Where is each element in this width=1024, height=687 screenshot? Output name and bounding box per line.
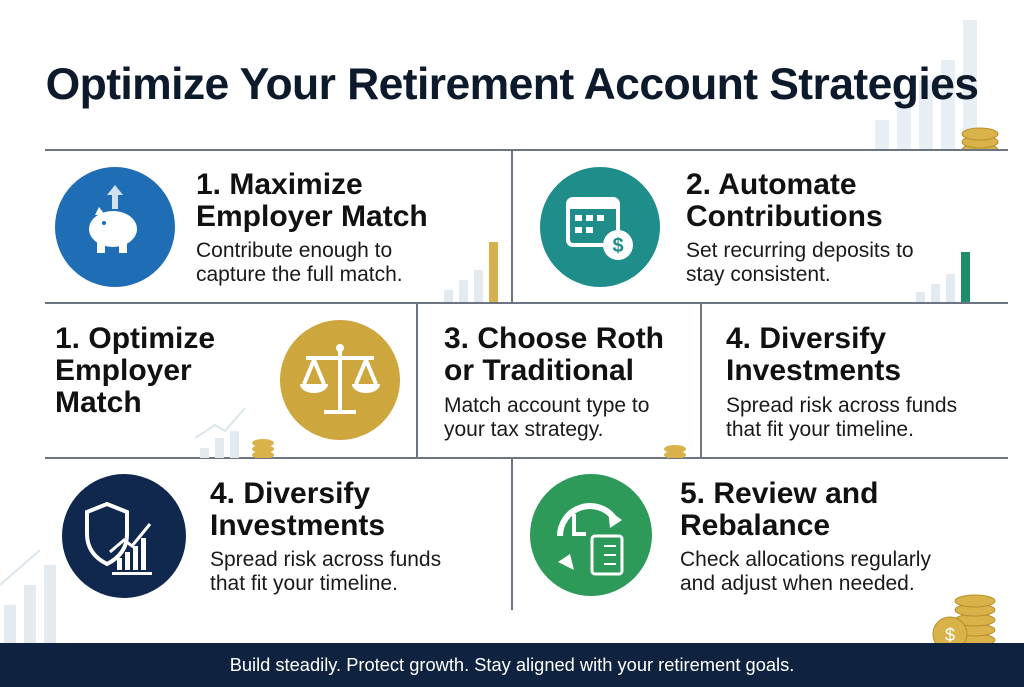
panel: maximize employer match: 1. Maximize — [196, 168, 363, 201]
panel: diversify investments (row 2): Investments — [726, 354, 901, 387]
panel: diversify investments (row 3): Spread risk across funds — [210, 548, 441, 571]
panel: diversify investments (row 2): that fit your timeline. — [726, 418, 914, 441]
panel: automate contributions — [540, 167, 970, 302]
decor: coins bottom right — [932, 594, 996, 644]
panel: maximize employer match: capture the full match. — [196, 263, 403, 286]
footer bar — [0, 643, 1024, 687]
panel: maximize employer match: Contribute enough to — [196, 239, 392, 262]
panel: diversify investments (row 3): that fit your timeline. — [210, 572, 398, 595]
panel: diversify investments (row 2) — [726, 322, 957, 441]
icon: calendar: $ — [612, 235, 624, 257]
panel: roth or traditional: Match account type to — [444, 394, 649, 417]
icon: shield with chart — [62, 474, 186, 598]
panel: optimize employer match: Match — [55, 386, 142, 419]
title: Optimize Your Retirement Account Strategies — [46, 60, 978, 109]
panel: diversify investments (row 2): 4. Diversify — [726, 322, 886, 355]
panel: review and rebalance: and adjust when needed. — [680, 572, 915, 595]
footer bar: Build steadily. Protect growth. Stay aligned with your retirement goals. — [230, 654, 794, 675]
panel: maximize employer match — [55, 167, 498, 302]
icon: calendar — [540, 167, 660, 287]
panel: maximize employer match: Employer Match — [196, 200, 428, 233]
panel: optimize employer match: 1. Optimize — [55, 322, 215, 355]
panel: review and rebalance — [530, 474, 931, 596]
panel: review and rebalance: Rebalance — [680, 509, 830, 542]
panel: diversify investments (row 3): Investments — [210, 509, 385, 542]
panel: roth or traditional: or Traditional — [444, 354, 634, 387]
panel: roth or traditional — [444, 322, 686, 458]
panel: automate contributions: Set recurring deposits to — [686, 239, 914, 262]
icon: cycle with clipboard — [530, 474, 652, 596]
decor: bars bottom left — [0, 549, 56, 643]
panel: automate contributions: stay consistent. — [686, 263, 831, 286]
panel: roth or traditional: 3. Choose Roth — [444, 322, 664, 355]
background decor: bars top right — [875, 20, 998, 149]
icon: piggy bank — [55, 167, 175, 287]
panel: automate contributions: Contributions — [686, 200, 883, 233]
panel: diversify investments (row 3): 4. Diversify — [210, 477, 370, 510]
panel: optimize employer match: Employer — [55, 354, 192, 387]
panel: diversify investments (row 2): Spread risk across funds — [726, 394, 957, 417]
panel: automate contributions: 2. Automate — [686, 168, 857, 201]
panel: optimize employer match — [55, 320, 400, 458]
panel: review and rebalance: Check allocations regularly — [680, 548, 931, 571]
panel: roth or traditional: your tax strategy. — [444, 418, 604, 441]
panel: diversify investments (row 3) — [62, 474, 441, 598]
panel: review and rebalance: 5. Review and — [680, 477, 878, 510]
icon: scales — [280, 320, 400, 440]
